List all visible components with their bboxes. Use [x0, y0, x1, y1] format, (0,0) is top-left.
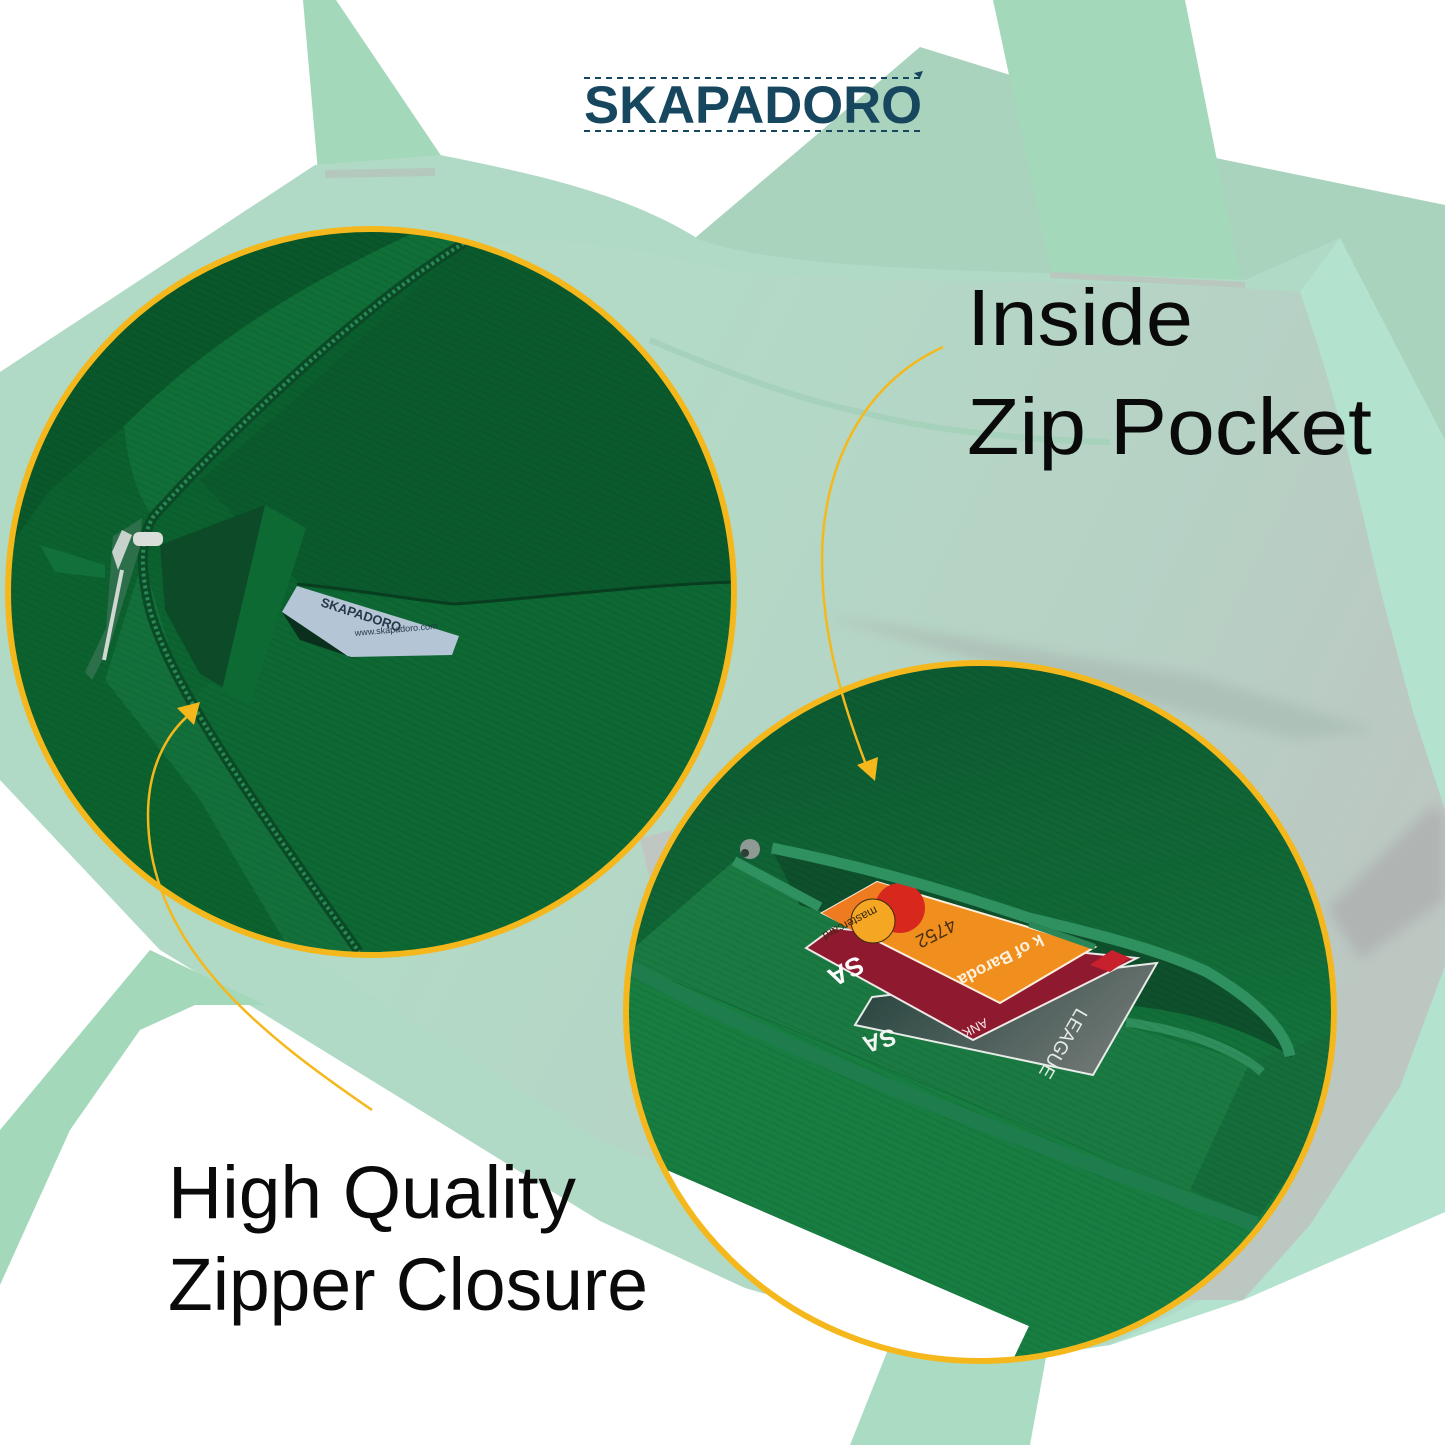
card: orange mastercard: mastercard: [820, 903, 880, 943]
woven label: www.skapadoro.com: [353, 621, 438, 638]
card: orange mastercard: k of Baroda: [954, 930, 1047, 990]
card: red bank: SA: [823, 950, 869, 993]
heading: high quality zipper closure: [168, 1151, 648, 1326]
crease: [297, 582, 735, 604]
yellow ring: [8, 229, 734, 955]
heading: inside zip pocket: Zip Pocket: [967, 382, 1372, 471]
zipper tape: [124, 234, 464, 517]
outer left panel: [15, 383, 169, 538]
yellow ring: [626, 663, 1334, 1361]
bag interior: [250, 242, 1445, 1300]
woven label: [282, 586, 459, 660]
green lining: [632, 666, 1331, 1356]
pocket flap: [160, 505, 265, 703]
card: orange mastercard: [820, 882, 1095, 1003]
heading: high quality zipper closure: Zipper Closure: [168, 1243, 648, 1326]
panel: inside zip pocket close-up circle: [600, 640, 1345, 1370]
zipper teeth: [143, 243, 464, 952]
card: league: LEAGUE: [1034, 1004, 1091, 1082]
pocket opening: [772, 850, 1292, 1058]
heading: high quality zipper closure: High Quality: [168, 1151, 576, 1234]
back panel of bag: [695, 47, 1445, 760]
logo: Skapadoro: SKAPADORO: [584, 76, 922, 135]
arrow: to zipper closure: [148, 702, 372, 1110]
pocket body: [632, 861, 1240, 1112]
lower zipper seam: [632, 968, 1256, 1224]
bottom right handle: [850, 1352, 1047, 1445]
right corner of pocket: [1190, 1084, 1316, 1217]
woven label: SKAPADORO: [319, 595, 403, 635]
right side strip: [1110, 238, 1445, 1345]
zipper pull: [740, 839, 760, 859]
bottom left handle: [0, 950, 265, 1285]
top right handle: [993, 0, 1243, 290]
lower interior lining: [190, 582, 740, 960]
pocket zipper: [772, 848, 1290, 1056]
card: orange mastercard: 4752: [912, 914, 959, 951]
card: red bank: [806, 928, 1137, 1041]
panel: zipper closure close-up circle: [0, 220, 745, 965]
zipper slider: [85, 518, 163, 680]
card: red bank: ANK: [960, 1015, 990, 1041]
lower band: [629, 965, 1084, 1326]
card: league: [855, 963, 1157, 1082]
top left handle: [303, 0, 442, 172]
card: league: SA: [859, 1022, 899, 1058]
heading: inside zip pocket: [967, 273, 1372, 471]
upper interior lining: [220, 501, 730, 602]
arrow: to inside zip pocket: [822, 347, 943, 781]
heading: inside zip pocket: Inside: [967, 273, 1193, 362]
